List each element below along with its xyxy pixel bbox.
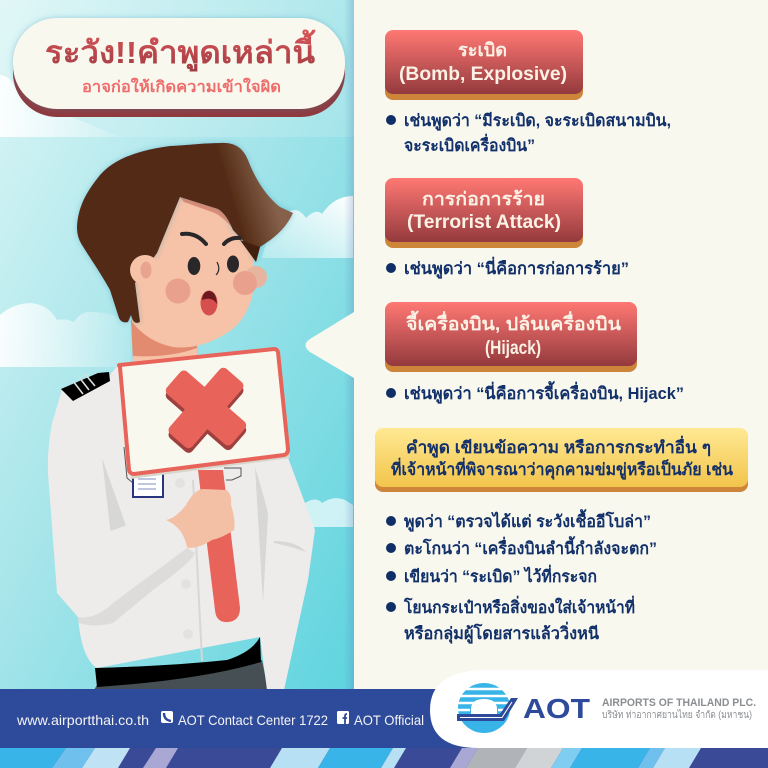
AOT logo <box>456 683 756 733</box>
text block: terrorist example: เช่นพูดว่า “นี่คือการก่อการร้าย” <box>404 256 629 280</box>
heading box: bomb <box>385 30 583 100</box>
text block: terrorist example <box>386 256 629 280</box>
text block: list of actions: ตะโกนว่า “เครื่องบินลำนี้กำลังจะตก” <box>404 536 657 558</box>
text block: bomb example <box>386 111 671 155</box>
heading box: hijack: (Hijack) <box>485 338 541 359</box>
panel: sky background <box>0 0 354 690</box>
eyebrows <box>182 234 240 244</box>
text block: hijack example: เช่นพูดว่า “นี่คือการจี้เครื่องบิน, Hijack” <box>404 381 684 405</box>
text block: list of actions: เขียนว่า “ระเบิด” ไว้ที่กระจก <box>404 564 597 586</box>
illustration: pilot holding sign <box>48 143 315 690</box>
heading box: bomb: (Bomb, Explosive) <box>399 64 567 85</box>
heading box: terrorist attack: การก่อการร้าย <box>422 189 545 209</box>
heading box: other actions: ที่เจ้าหน้าที่พิจารณาว่าคุกคามข่มขู่หรือเป็นภัย เช่น <box>391 457 734 481</box>
forehead shadow <box>180 197 236 232</box>
decorative stripe band <box>0 748 768 768</box>
eyes <box>188 257 200 275</box>
sign pole <box>198 470 240 622</box>
mouth <box>200 290 218 316</box>
heading box: hijack: จี้เครื่องบิน, ปล้นเครื่องบิน <box>406 310 622 334</box>
trousers <box>94 660 268 690</box>
facebook text: AOT Official <box>354 712 424 728</box>
nose <box>216 262 219 275</box>
text block: list of actions: โยนกระเป๋าหรือสิ่งของใส่เจ้าหน้าที่ <box>403 595 635 617</box>
website text: www.airportthai.co.th <box>16 712 149 728</box>
epaulette <box>61 372 110 401</box>
company name english: AIRPORTS OF THAILAND PLC. <box>602 697 756 709</box>
title heading: ระวัง!!คำพูดเหล่านี้ <box>45 29 316 72</box>
heading box: other actions: คำพูด เขียนข้อความ หรือการกระทำอื่น ๆ <box>406 435 711 459</box>
neck <box>131 320 198 362</box>
right ear <box>245 266 267 288</box>
buttons <box>175 478 193 639</box>
logo wordmark: AOT <box>523 693 590 724</box>
shirt <box>48 365 315 690</box>
title banner <box>13 18 345 117</box>
hand <box>166 489 235 548</box>
text block: bomb example: จะระเบิดเครื่องบิน” <box>404 133 535 155</box>
forearm sleeve <box>57 520 187 617</box>
face <box>132 197 254 347</box>
shirt folds <box>102 458 306 661</box>
icon: facebook <box>337 711 349 724</box>
left ear <box>130 255 160 285</box>
text block: list of actions: หรือกลุ่มผู้โดยสารแล้ววิ่งหนี <box>404 621 600 645</box>
logo emblem <box>456 683 518 733</box>
sleeve shadow <box>78 548 195 626</box>
hair <box>77 143 293 323</box>
heading box: terrorist attack: (Terrorist Attack) <box>407 212 561 233</box>
text block: list of actions <box>386 509 657 645</box>
cheeks <box>166 278 190 304</box>
heading box: hijack <box>385 302 637 372</box>
id badge <box>124 447 241 497</box>
panel: right cream background <box>306 0 768 690</box>
head <box>77 143 293 347</box>
contact text: AOT Contact Center 1722 <box>178 712 328 728</box>
sign board <box>119 349 290 479</box>
heading box: bomb: ระเบิด <box>458 40 507 60</box>
text block: list of actions: พูดว่า “ตรวจได้แต่ ระวังเชื้ออีโบล่า” <box>404 509 651 533</box>
title subheading: อาจก่อให้เกิดความเข้าใจผิด <box>82 77 281 96</box>
text block: bomb example: เช่นพูดว่า “มีระเบิด, จะระเบิดสนามบิน, <box>404 111 671 132</box>
belt <box>95 637 261 687</box>
icon: red cross <box>143 347 269 473</box>
footer bar <box>0 670 768 748</box>
icon: phone <box>161 711 173 723</box>
heading box: terrorist attack <box>385 178 583 248</box>
heading box: other actions <box>375 428 748 492</box>
